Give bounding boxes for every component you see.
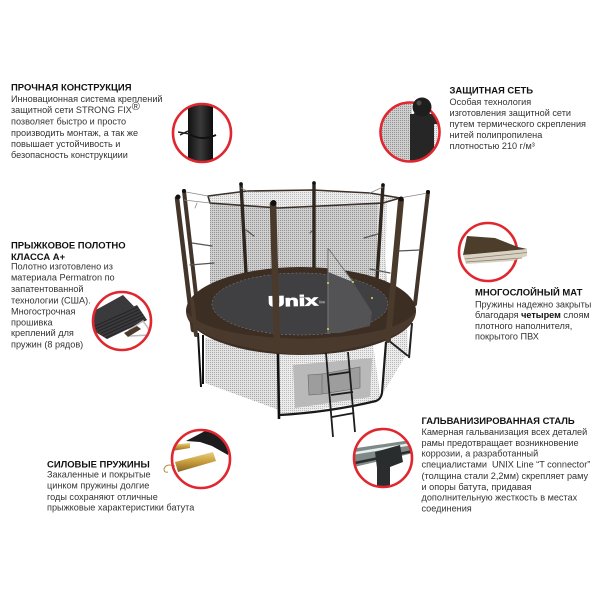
front poles [192,196,404,345]
text block: прошивка [11,318,54,328]
text block: ® [132,101,140,113]
panel: защитная сеть [378,86,589,164]
heading: СИЛОВЫЕ ПРУЖИНЫ [47,460,150,470]
safety net [208,190,400,290]
logo: Unix line [268,292,326,311]
text block: (толщина стали 2,2мм) скрепляет раму [422,471,588,481]
icon: layered mat [459,223,527,281]
logo: Unix line: line [319,299,326,304]
text block: покрытого ПВХ [475,332,539,342]
ladder [326,352,355,437]
text block: дополнительную жесткость в местах [422,492,578,502]
icon: pole clamp [173,100,231,170]
text block: прыжковые характеристики батута [47,502,195,512]
text block: позволяет быстро и просто [11,116,126,126]
text block: Камерная гальванизация всех деталей [422,427,587,437]
icon: net top with ball cap [378,98,440,164]
text block: Инновационная система креплений [11,94,163,104]
panel: гальванизированная сталь [350,416,593,514]
text block: безопасность конструкциии [11,150,128,160]
text block: Особая технология [450,97,531,107]
text block: запатентованной [11,284,84,294]
text block: Многострочная [11,306,75,316]
entrance flap [327,248,373,334]
text block: путем термического скрепления [450,119,586,129]
icon: springs [164,430,232,488]
text block: Закаленные и покрытые [47,470,151,480]
text block: и опоры батута, придавая [422,482,532,492]
text block: соединения [422,504,472,514]
text block: технологии (США). [11,296,91,306]
text block: плотного наполнителя, [475,321,572,331]
text block: Полотно изготовлено из [11,262,113,272]
panel: прочная конструкция [11,82,231,170]
text block: благодаря четырем слоям [475,310,590,320]
panel: многослойный мат [459,223,594,342]
text block: цинком пружины долгие [47,480,149,490]
text block: повышает устойчивость и [11,139,120,149]
icon: T connector [352,428,414,488]
text block: годы сохраняют отличные [47,492,158,502]
text block: Пружины надежно закрыты [475,300,591,310]
text block: креплений для [11,328,74,338]
text block: коррозии, а разработанный [422,448,538,458]
logo: Unix line: Unix [268,292,319,311]
heading: ПРОЧНАЯ КОНСТРУКЦИЯ [11,82,132,94]
text block: защитной сети STRONG FIX [11,105,132,115]
text block: изготовления защитной сети [450,108,571,118]
padded frame [186,267,416,355]
text block: производить монтаж, а так же [11,128,138,138]
heading: КЛАССА А+ [11,252,66,263]
heading: ЗАЩИТНАЯ СЕТЬ [450,86,533,96]
panel: силовые пружины [47,430,232,512]
text block: материала Permatron по [11,272,115,282]
heading: ГАЛЬВАНИЗИРОВАННАЯ СТАЛЬ [422,416,575,427]
text block: пружин (8 рядов) [11,340,83,350]
text block: нитей полипропилена [450,130,543,140]
text block: плотностью 210 г/м³ [450,141,535,151]
heading: МНОГОСЛОЙНЫЙ МАТ [475,286,583,298]
text block: рамы предотвращает возникновение [422,438,579,448]
panel: прыжковое полотно [11,240,151,350]
icon: mat stitching [92,292,151,350]
heading: ПРЫЖКОВОЕ ПОЛОТНО [11,240,126,252]
back poles and straps [176,181,430,330]
under-frame enclosure [198,323,412,419]
trampoline illustration [176,181,430,437]
jumping mat [212,273,388,335]
text block: специалистами UNIX Line “T connector” [422,460,590,470]
